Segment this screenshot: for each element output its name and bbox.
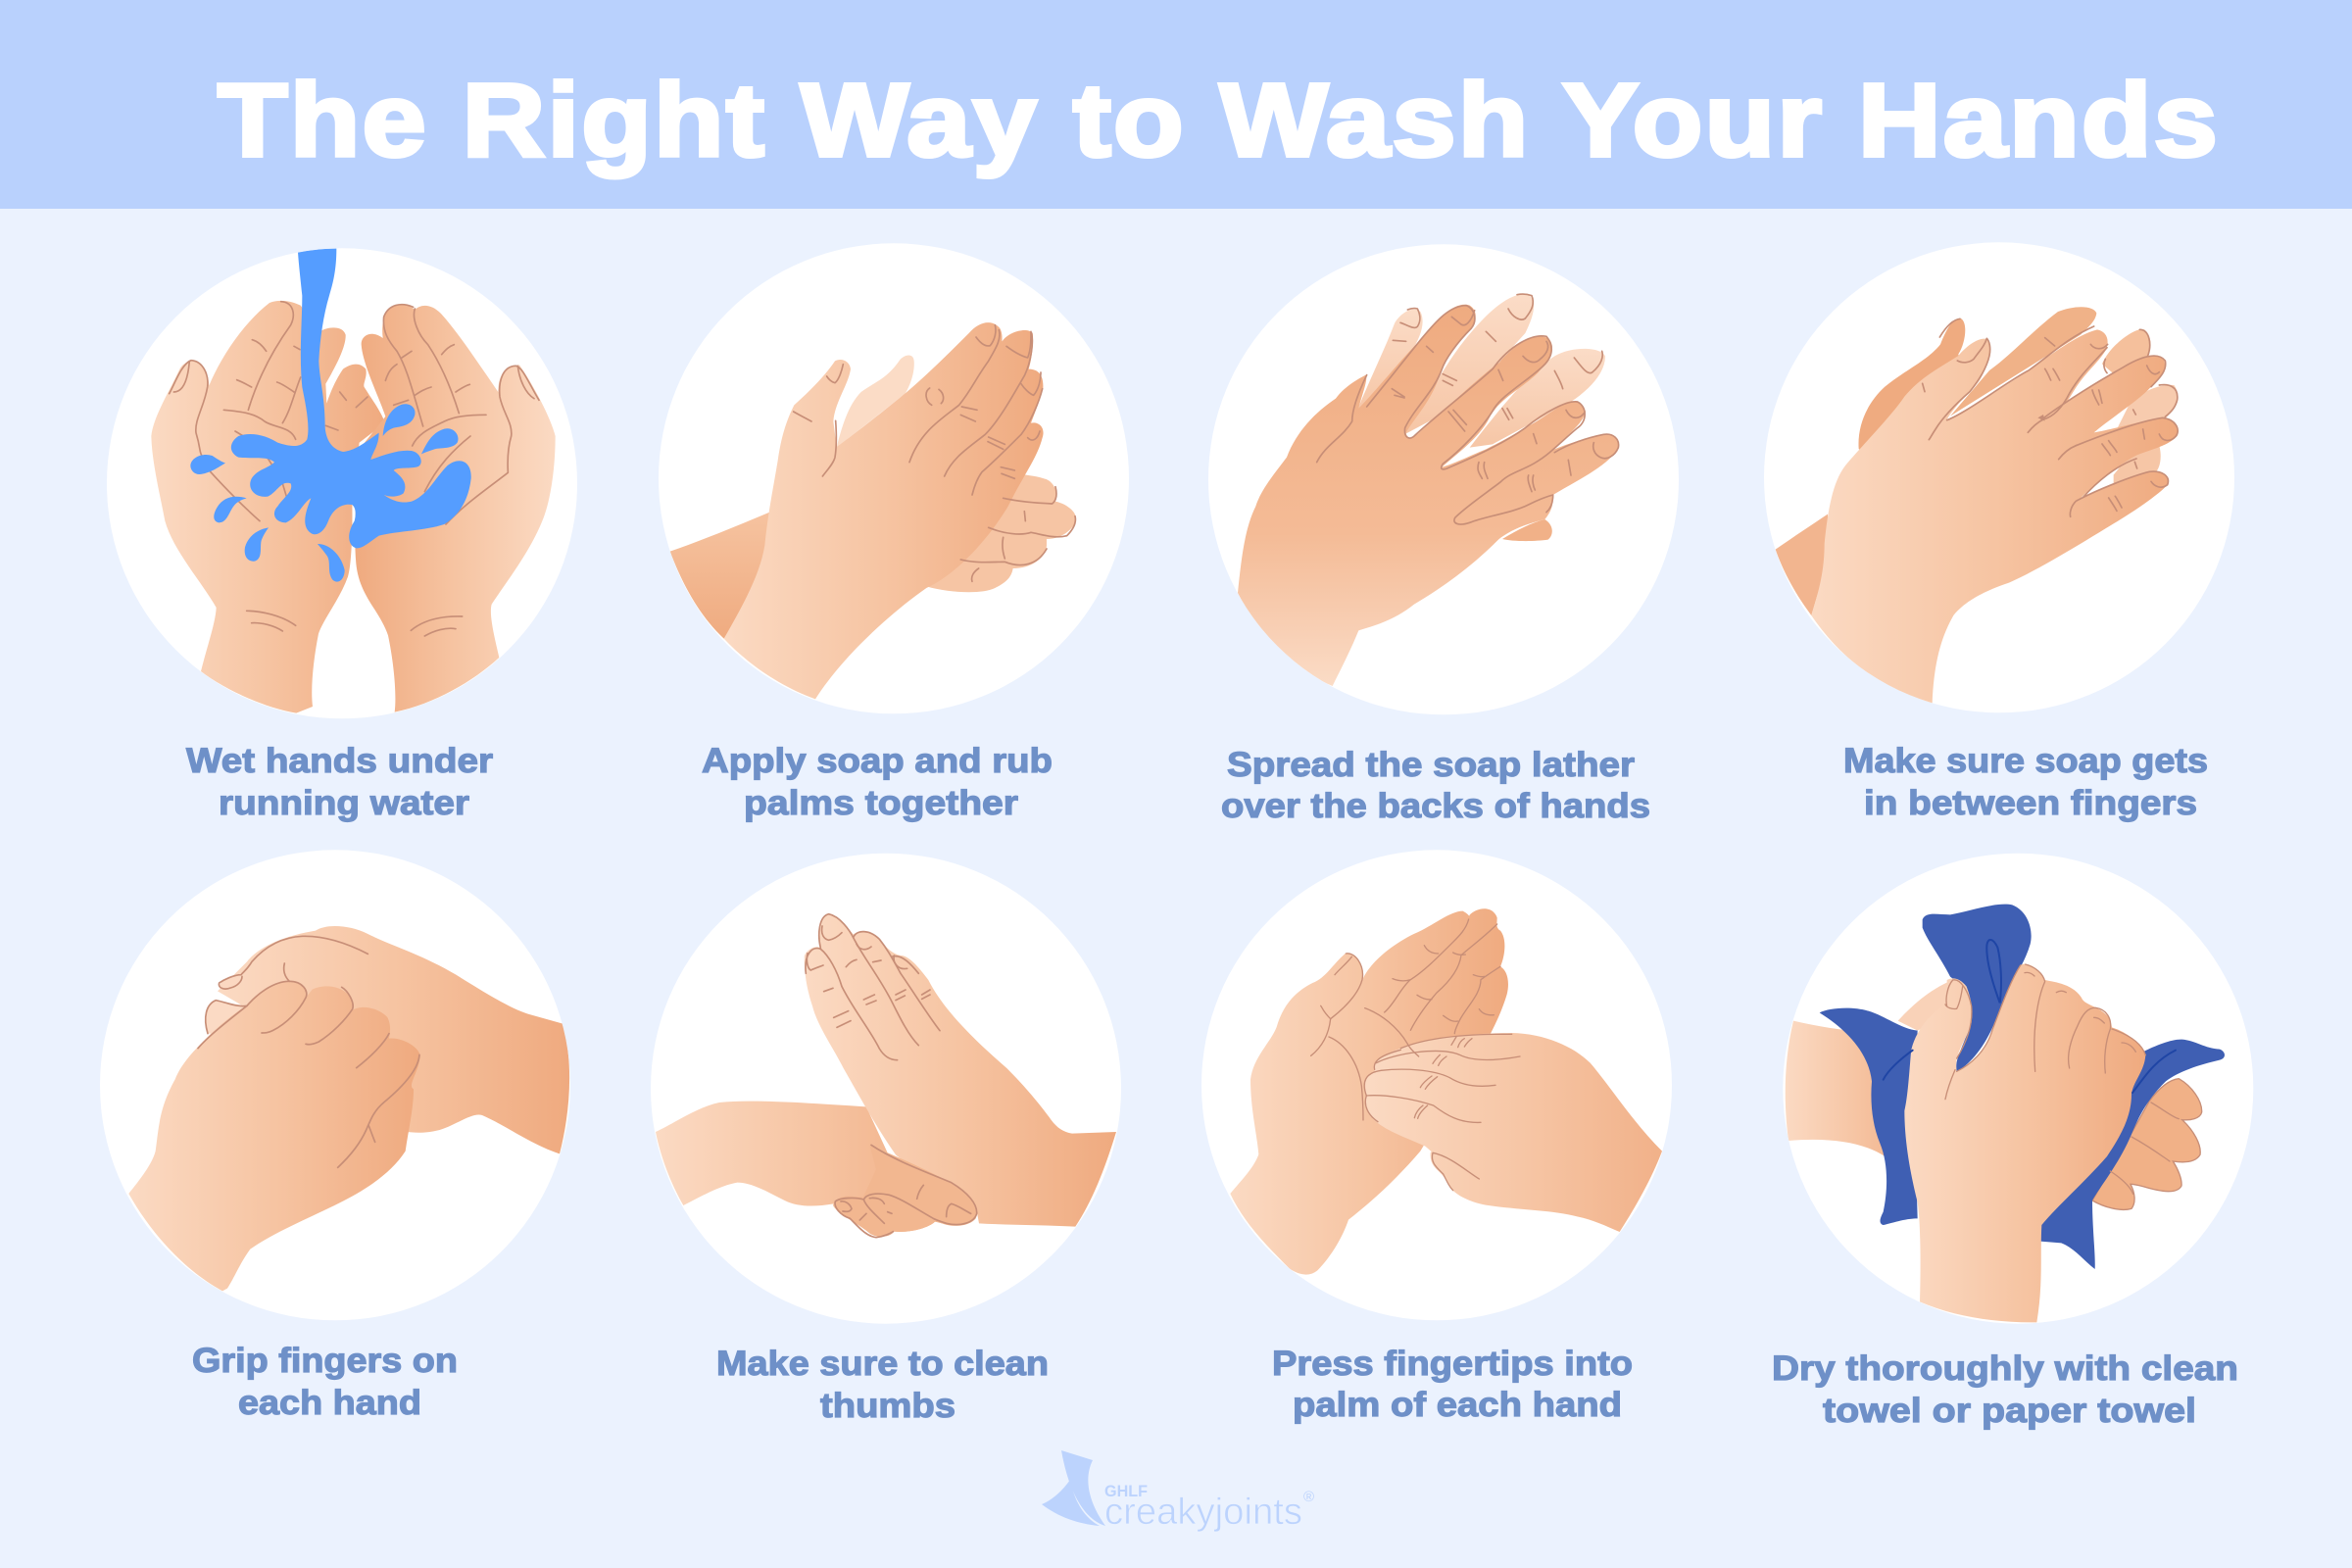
- panel: step 7 fingertips into palm: [1201, 850, 1672, 1424]
- caption 1: running water: [219, 784, 469, 822]
- white circle 2: [659, 243, 1129, 713]
- panel: step 6 clean thumbs: [651, 854, 1121, 1425]
- caption 8: towel or paper towel: [1823, 1392, 2196, 1430]
- caption 7: palm of each hand: [1293, 1386, 1622, 1424]
- illustration: soap over backs of hands: [1238, 294, 1619, 686]
- caption 8: Dry thoroughly with clean: [1772, 1349, 2238, 1388]
- white circle 6: [651, 854, 1121, 1324]
- panel: step 8 dry with towel: [1772, 854, 2253, 1430]
- panel: step 3 backs of hands: [1208, 244, 1679, 825]
- panel: step 2 rub palms: [659, 243, 1129, 822]
- illustration: gripped fingers: [128, 926, 569, 1291]
- logo text: GHLF: [1104, 1482, 1148, 1500]
- caption 2: palms together: [744, 784, 1018, 822]
- panel: step 1 wet hands: [107, 248, 577, 822]
- water splash: [190, 249, 471, 582]
- illustration: cleaning thumbs: [656, 914, 1116, 1238]
- caption 5: each hand: [238, 1384, 421, 1422]
- caption 2: Apply soap and rub: [702, 742, 1053, 780]
- header banner: [0, 0, 2352, 209]
- illustration: palms rubbing together: [670, 322, 1076, 699]
- logo text: creakyjoints: [1104, 1492, 1302, 1533]
- caption 4: [1843, 742, 2208, 822]
- panel: step 4 between fingers: [1764, 242, 2234, 822]
- caption 5: Grip fingers on: [192, 1342, 458, 1380]
- caption 7: [1272, 1345, 1633, 1424]
- panel: step 5 grip fingers: [100, 850, 570, 1422]
- illustration: fingertips pressed into palm: [1230, 908, 1662, 1275]
- illustration: hands under running water: [151, 249, 556, 713]
- illustration: soap between fingers: [1776, 307, 2179, 703]
- illustration: drying hands with blue towel: [1786, 905, 2225, 1322]
- white circle 3: [1208, 244, 1679, 714]
- caption 6: Make sure to clean: [716, 1345, 1049, 1383]
- towel: [1820, 905, 2225, 1269]
- title: The Right Way to Wash Your Hands: [218, 63, 2220, 178]
- logo mark: [1042, 1450, 1105, 1526]
- caption 6: [716, 1345, 1049, 1425]
- caption 4: Make sure soap gets: [1843, 742, 2208, 780]
- caption 4: in between fingers: [1864, 784, 2197, 822]
- caption 7: Press fingertips into: [1272, 1345, 1633, 1383]
- caption 1: [186, 742, 493, 822]
- white circle 8: [1783, 854, 2253, 1324]
- caption 1: Wet hands under: [186, 742, 493, 780]
- caption 2: [702, 742, 1053, 822]
- white circle 5: [100, 850, 570, 1320]
- white circle 1: [107, 248, 577, 718]
- caption 5: [192, 1342, 458, 1422]
- caption 6: thumbs: [820, 1387, 956, 1425]
- caption 3: [1221, 746, 1650, 825]
- white circle 7: [1201, 850, 1672, 1320]
- white circle 4: [1764, 242, 2234, 712]
- logo text: ®: [1303, 1489, 1314, 1505]
- caption 3: Spread the soap lather: [1227, 746, 1635, 784]
- caption 3: over the backs of hands: [1221, 787, 1650, 825]
- towel fold lines: [1884, 940, 2176, 1093]
- caption 8: [1772, 1349, 2238, 1430]
- logo: GHLF creakyjoints: [1042, 1450, 1314, 1533]
